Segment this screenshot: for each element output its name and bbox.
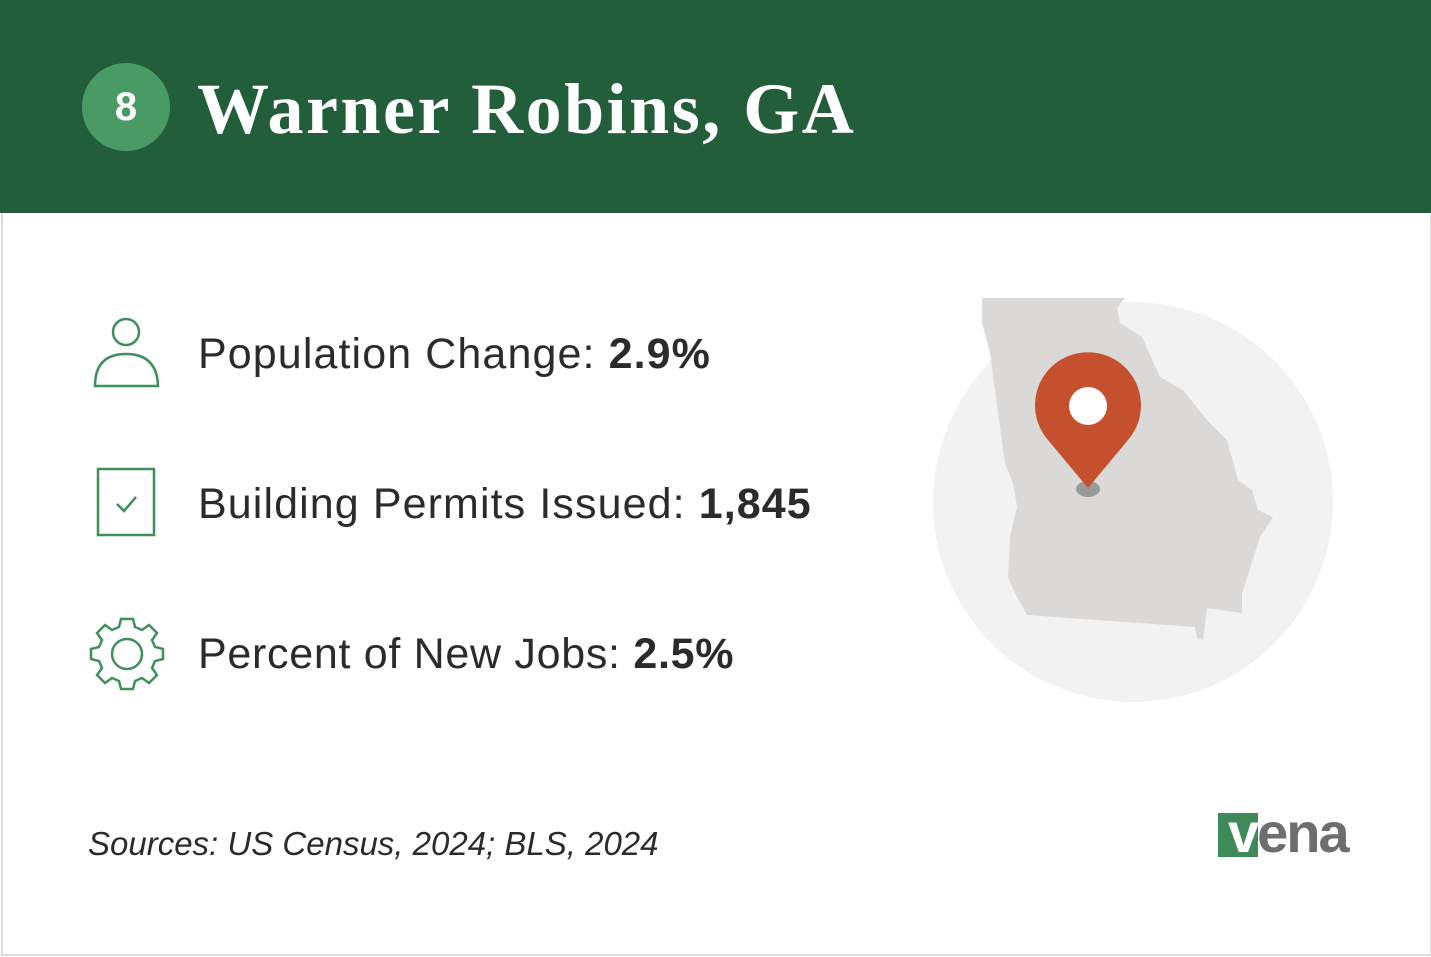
badge: rank 8: 8 [115, 85, 137, 129]
icon: gear [90, 618, 164, 690]
icon: person [94, 318, 160, 388]
pin [1035, 352, 1141, 497]
sources: Sources: US Census, 2024; BLS, 2024 [88, 825, 659, 862]
icon: checkbox [96, 468, 156, 536]
badge: rank 8 [82, 63, 170, 151]
stat: population: Population Change: 2.9% [198, 330, 711, 378]
title: Warner Robins, GA [197, 69, 856, 149]
stat: jobs: Percent of New Jobs: 2.5% [198, 630, 734, 678]
stat: permits: Building Permits Issued: 1,845 [198, 480, 812, 528]
header [0, 0, 1431, 213]
logo: vena: vena [1228, 801, 1348, 864]
